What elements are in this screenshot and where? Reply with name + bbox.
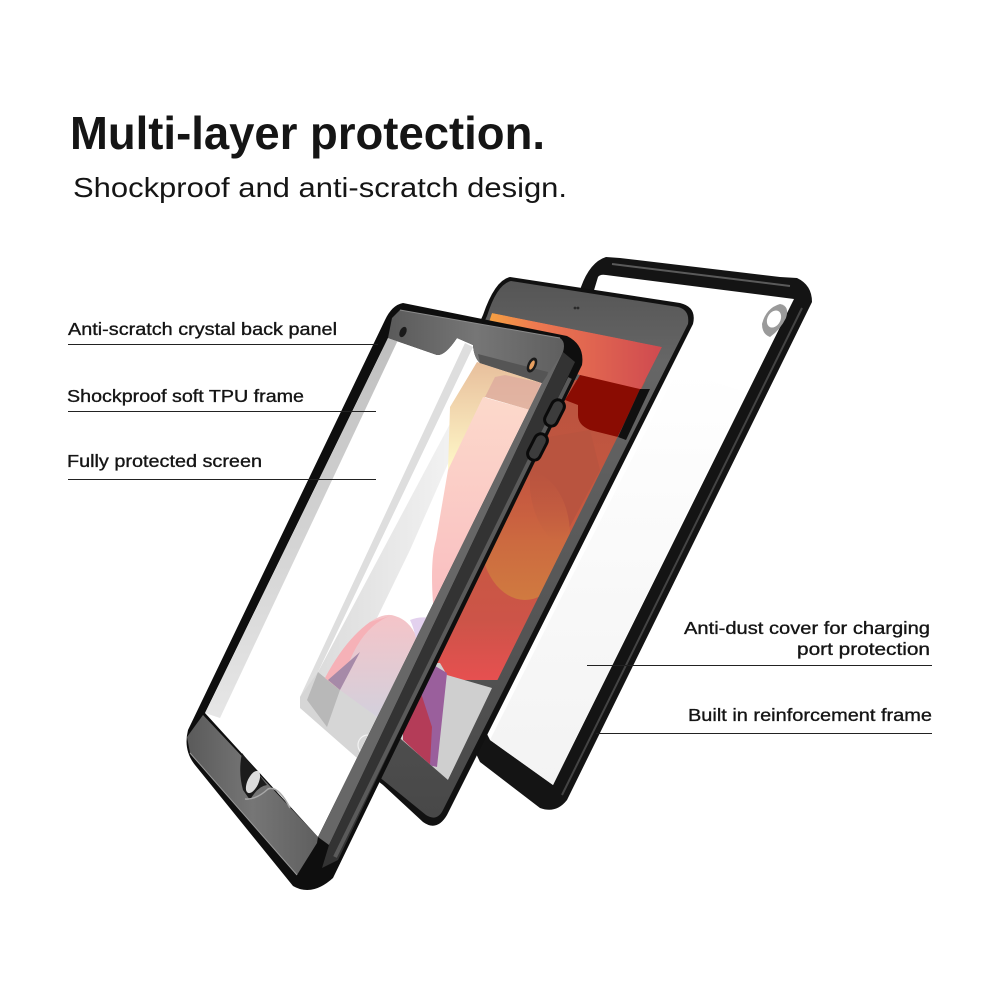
label: built in reinforcement frame: Built in reinforcement frame	[688, 705, 932, 725]
tablet screen wallpaper	[400, 313, 662, 780]
camera	[574, 307, 579, 309]
port hole ring	[762, 304, 787, 337]
label: fully protected screen: Fully protected screen	[67, 451, 262, 471]
label: anti-dust cover: Anti-dust cover for charging	[684, 618, 930, 638]
label: anti-scratch crystal back panel: Anti-scratch crystal back panel	[68, 319, 337, 339]
front layer: soft TPU frame	[187, 303, 582, 890]
side buttons	[525, 398, 567, 462]
right bezel	[318, 352, 563, 845]
frame top bezel	[388, 310, 564, 384]
middle layer: tablet	[380, 277, 694, 826]
back layer: reinforcement frame	[460, 257, 812, 810]
camera holes	[398, 326, 539, 374]
title: Multi-layer protection.	[70, 107, 545, 159]
clear opening with ghost screen	[205, 338, 542, 837]
subtitle: Shockproof and anti-scratch design.	[73, 172, 567, 203]
label: anti-dust cover: port protection	[797, 639, 930, 659]
home button notch	[240, 753, 290, 808]
label: shockproof soft TPU frame: Shockproof soft TPU frame	[67, 386, 304, 406]
bottom bezel	[187, 715, 318, 875]
label: anti-dust cover	[587, 618, 932, 666]
